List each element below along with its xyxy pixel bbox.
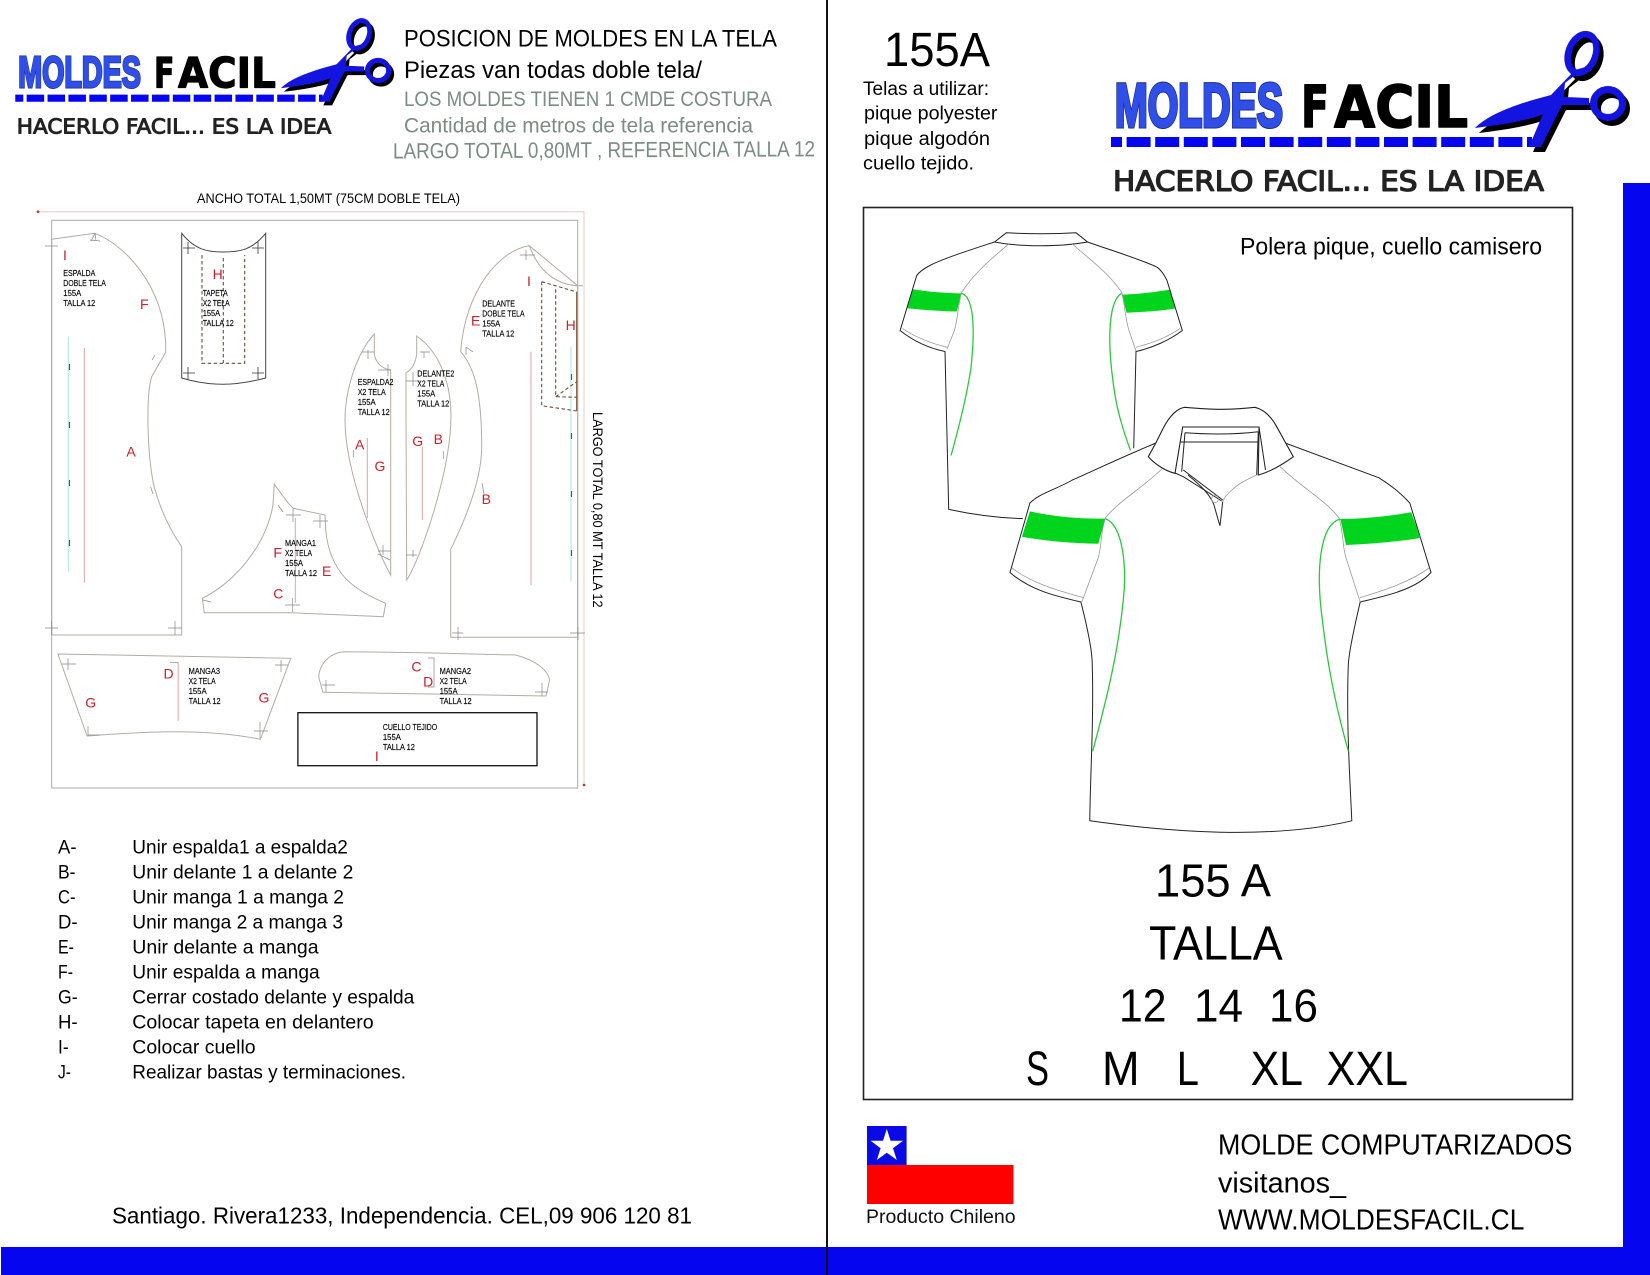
piece: espalda — [45, 233, 182, 635]
red assembly letters: E — [471, 312, 480, 328]
red assembly letters: F — [140, 296, 149, 312]
assembly instructions list: J- — [58, 1061, 71, 1083]
piece labels: MANGA1 — [285, 538, 316, 548]
total length note: LARGO TOTAL 0,80MT , REFERENCIA TALLA 12 — [393, 136, 815, 163]
logo wordmark MOLDES: MOLDES — [1115, 72, 1283, 140]
red assembly letters: E — [322, 563, 331, 579]
assembly instructions list: C- — [58, 886, 76, 908]
assembly instructions list: I- — [58, 1036, 69, 1058]
stitched dashed line — [1111, 137, 1532, 147]
fabrics list: cuello tejido. — [863, 154, 974, 174]
red assembly letters: H — [566, 317, 576, 333]
stitched dashed line — [15, 93, 323, 103]
piece: tapeta — [182, 233, 266, 384]
model number: 155 A — [1155, 855, 1271, 907]
logo wordmark MOLDES — [18, 48, 141, 97]
assembly instructions list: D- — [58, 911, 78, 933]
piece labels: 155A — [417, 389, 436, 399]
letter sizes: M — [1102, 1043, 1140, 1096]
piece: cuello tejido — [298, 713, 537, 766]
piece labels: X2 TELA — [203, 298, 230, 308]
piece labels: 155A — [440, 686, 458, 696]
piece labels: TALLA 12 — [189, 696, 221, 706]
red assembly letters: D — [164, 665, 174, 681]
dimension lines — [37, 210, 585, 786]
assembly instructions list: A- — [58, 836, 76, 858]
assembly instructions list — [58, 836, 414, 1083]
piece labels: TALLA 12 — [203, 318, 234, 328]
assembly instructions list: Cerrar costado delante y espalda — [132, 986, 414, 1008]
piece: espalda 2 — [345, 334, 391, 575]
piece labels: X2 TELA — [440, 676, 467, 686]
center divider — [826, 0, 828, 1275]
assembly instructions list: Unir delante a manga — [132, 936, 319, 958]
icon: scissors — [1475, 30, 1626, 152]
red assembly letters: B — [482, 491, 491, 507]
red assembly letters: A — [126, 444, 136, 460]
letter sizes: XL — [1251, 1043, 1303, 1096]
assembly instructions list: Colocar tapeta en delantero — [132, 1011, 374, 1033]
red assembly letters: G — [375, 458, 385, 474]
logo wordmark FACIL: ACIL — [1334, 73, 1468, 141]
piece labels: 155A — [203, 308, 220, 318]
piece labels: TALLA 12 — [482, 329, 514, 339]
flag caption: Producto Chileno — [866, 1207, 1016, 1228]
piece labels: TALLA 12 — [358, 407, 390, 417]
red assembly letters: B — [434, 431, 443, 447]
bottom blue bar — [1, 1247, 1650, 1275]
fabric quantity note: Cantidad de metros de tela referencia — [404, 115, 753, 138]
panel frame — [864, 208, 1572, 1100]
logo wordmark FACIL: ACIL — [178, 49, 276, 97]
piece labels: MANGA3 — [189, 666, 220, 676]
piece labels: TALLA 12 — [440, 696, 472, 706]
numeric sizes: 16 — [1269, 980, 1318, 1032]
fabrics list: pique polyester — [864, 104, 998, 124]
red assembly letters: C — [411, 659, 421, 675]
piece labels: DELANTE2 — [417, 369, 454, 379]
piece labels: 155A — [189, 686, 207, 696]
piece labels: 155A — [358, 397, 376, 407]
logo wordmark FACIL: F — [1301, 73, 1329, 141]
red assembly letters: G — [412, 433, 423, 449]
assembly instructions list: Realizar bastas y terminaciones. — [132, 1061, 406, 1083]
assembly instructions list: Unir delante 1 a delante 2 — [132, 861, 353, 883]
logo wordmark FACIL: F — [154, 49, 174, 97]
logo tagline: HACERLO FACIL... ES LA IDEA — [1113, 165, 1544, 198]
icon: scissors — [281, 18, 392, 105]
logo: Moldes Facil (left page) — [15, 18, 392, 138]
piece labels: 155A — [383, 732, 401, 742]
piece labels: TALLA 12 — [417, 399, 449, 409]
fabrics list: pique algodón — [864, 129, 990, 150]
assembly instructions list: Unir manga 2 a manga 3 — [132, 911, 343, 933]
numeric sizes: 12 — [1119, 980, 1166, 1032]
website block: MOLDE COMPUTARIZADOS — [1218, 1129, 1572, 1161]
illustration: polo shirt front view — [1010, 407, 1431, 832]
piece labels: DOBLE TELA — [63, 278, 106, 288]
logo: Moldes Facil (right page) — [1111, 30, 1626, 198]
red assembly letters: G — [259, 689, 269, 705]
piece: delante — [451, 246, 585, 640]
subheading line: Piezas van todas doble tela/ — [404, 57, 702, 84]
size heading: TALLA — [1149, 917, 1283, 970]
piece labels: ESPALDA2 — [358, 377, 394, 387]
panel: garment and sizes — [864, 208, 1572, 1100]
assembly instructions list: G- — [58, 986, 78, 1008]
header text: mold position notes — [393, 26, 815, 163]
right blue bar — [1623, 183, 1650, 1275]
piece labels: 155A — [482, 319, 501, 329]
length dimension label: LARGO TOTAL 0,80 MT TALLA 12 — [590, 412, 606, 608]
icon: Chilean flag — [867, 1126, 1014, 1204]
letter sizes: XXL — [1327, 1043, 1408, 1096]
assembly instructions list: H- — [58, 1011, 78, 1033]
heading line: POSICION DE MOLDES EN LA TELA — [404, 26, 777, 53]
website block: WWW.MOLDESFACIL.CL — [1218, 1204, 1524, 1236]
logo tagline: HACERLO FACIL... ES LA IDEA — [17, 114, 331, 138]
piece labels: ESPALDA — [63, 268, 96, 278]
assembly instructions list: F- — [58, 961, 73, 983]
piece: manga 2 — [319, 652, 550, 696]
red assembly letters: H — [213, 266, 223, 282]
piece labels: 155A — [285, 558, 303, 568]
website block — [1218, 1129, 1572, 1236]
piece labels: MANGA2 — [440, 666, 471, 676]
piece labels: TAPETA — [203, 288, 228, 298]
red assembly letters — [63, 247, 576, 764]
logo wordmark MOLDES: MOLDES — [18, 48, 141, 97]
piece labels: CUELLO TEJIDO — [383, 722, 437, 732]
numeric sizes — [1119, 980, 1318, 1032]
red assembly letters: I — [375, 748, 379, 764]
model code: 155A — [884, 24, 990, 77]
piece: manga 3 — [58, 654, 291, 739]
panel: pattern layout — [37, 210, 585, 788]
piece labels: DOBLE TELA — [482, 309, 525, 319]
piece: manga 1 — [202, 484, 386, 617]
assembly instructions list: B- — [58, 861, 76, 883]
piece labels: X2 TELA — [358, 387, 386, 397]
illustration: polo shirt back view — [900, 233, 1182, 519]
red assembly letters: G — [85, 694, 96, 710]
width dimension label: ANCHO TOTAL 1,50MT (75CM DOBLE TELA) — [197, 191, 460, 206]
logo wordmark MOLDES: MOLDES — [1115, 72, 1283, 140]
red assembly letters: A — [355, 436, 365, 452]
red assembly letters: D — [423, 674, 433, 690]
assembly instructions list: E- — [58, 936, 74, 958]
red assembly letters: F — [273, 545, 282, 561]
logo wordmark MOLDES: MOLDES — [18, 48, 141, 97]
piece: delante 2 — [406, 336, 451, 580]
red assembly letters: I — [527, 273, 531, 289]
piece labels: X2 TELA — [189, 676, 216, 686]
red assembly letters: C — [273, 585, 283, 601]
piece labels: TALLA 12 — [285, 568, 317, 578]
assembly instructions list: Colocar cuello — [132, 1036, 256, 1058]
letter sizes: S — [1026, 1043, 1049, 1096]
fabrics list — [863, 79, 998, 174]
collar band and placket — [1175, 427, 1266, 526]
fabrics list: Telas a utilizar: — [863, 79, 989, 100]
seam note: LOS MOLDES TIENEN 1 CMDE COSTURA — [404, 88, 772, 111]
assembly instructions list: Unir manga 1 a manga 2 — [132, 886, 344, 908]
letter sizes — [1026, 1043, 1408, 1096]
fabric sheet outline — [52, 220, 578, 788]
garment description: Polera pique, cuello camisero — [1240, 234, 1542, 261]
piece labels: DELANTE — [482, 299, 515, 309]
red assembly letters: I — [63, 247, 67, 263]
logo wordmark MOLDES — [1115, 72, 1283, 140]
assembly instructions list: Unir espalda a manga — [132, 961, 320, 983]
piece labels: TALLA 12 — [383, 742, 415, 752]
numeric sizes: 14 — [1194, 980, 1243, 1032]
piece labels: X2 TELA — [417, 379, 445, 389]
letter sizes: L — [1177, 1043, 1199, 1096]
assembly instructions list: Unir espalda1 a espalda2 — [132, 836, 348, 858]
collar — [1148, 407, 1293, 475]
piece labels: X2 TELA — [285, 548, 312, 558]
piece labels: 155A — [63, 288, 82, 298]
website block: visitanos_ — [1218, 1168, 1347, 1200]
contact address: Santiago. Rivera1233, Independencia. CEL,09 906 120 81 — [112, 1202, 692, 1228]
piece labels: TALLA 12 — [63, 298, 95, 308]
piece labels — [63, 268, 525, 752]
